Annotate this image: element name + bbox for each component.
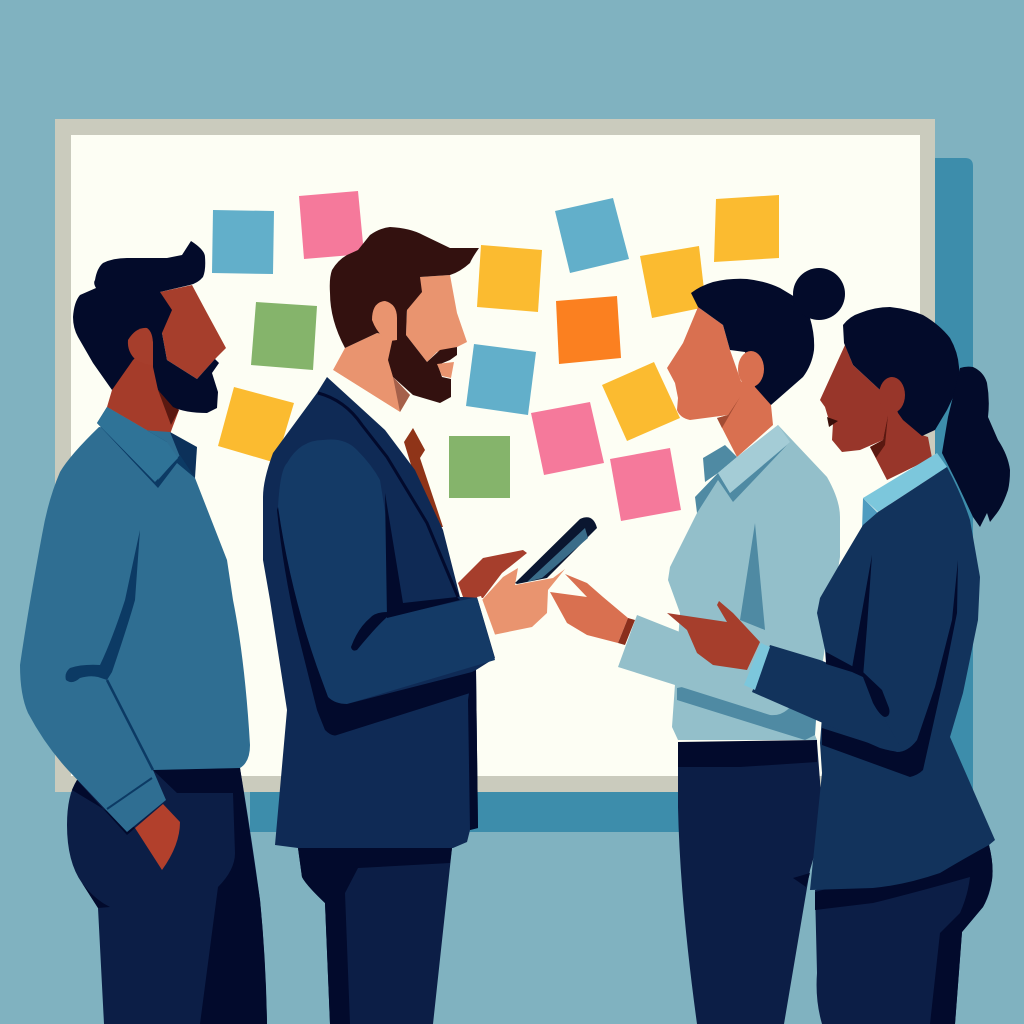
- trousers: [298, 848, 452, 1024]
- board shadow: [250, 158, 973, 832]
- arm highlight: [278, 439, 495, 704]
- cuff: [477, 596, 497, 650]
- face: [667, 307, 743, 420]
- neck: [107, 340, 179, 442]
- person 2: bearded man in navy suit: [263, 227, 597, 1024]
- trousers: [678, 742, 822, 1024]
- ear: [372, 301, 397, 341]
- sticky notes: [212, 191, 779, 521]
- blazer folds: [852, 555, 872, 677]
- lip: [437, 362, 454, 378]
- person 3: woman in light blue shirt: [550, 268, 845, 1024]
- ear: [738, 351, 764, 387]
- hair: [73, 241, 205, 390]
- person 4: woman in navy blazer: [667, 307, 1010, 1024]
- dark band under arm: [277, 507, 472, 735]
- neck: [333, 333, 410, 412]
- person 1: man in blue shirt: [20, 241, 267, 1024]
- elbow crease: [351, 612, 388, 651]
- inner collar: [703, 445, 737, 482]
- blazer: [810, 467, 995, 890]
- neck: [717, 380, 773, 457]
- collar: [695, 425, 790, 513]
- shirt collar: [862, 453, 947, 530]
- shirt: [668, 425, 840, 740]
- hair and bun: [691, 268, 845, 405]
- hand: [550, 574, 628, 643]
- sleeve shadow: [677, 670, 818, 740]
- ponytail: [942, 367, 1010, 527]
- beard: [153, 333, 219, 413]
- face: [406, 275, 467, 362]
- hair: [843, 307, 960, 436]
- whiteboard: [55, 119, 935, 792]
- ear: [128, 328, 153, 365]
- jacket: [263, 377, 495, 848]
- hair: [330, 227, 479, 348]
- cuff: [744, 643, 770, 690]
- hand in pocket: [135, 804, 180, 870]
- beard: [388, 305, 457, 403]
- shirt fold: [740, 523, 765, 630]
- shirt: [20, 427, 250, 832]
- arm: [752, 645, 903, 752]
- trousers: [815, 845, 993, 1024]
- hand: [667, 601, 760, 670]
- sleeve fold and seam: [66, 530, 140, 682]
- lapel line: [318, 393, 458, 597]
- ear: [879, 377, 905, 413]
- sleeve: [618, 615, 810, 715]
- face: [820, 345, 895, 452]
- hands: [458, 550, 527, 598]
- shirt and tie: [327, 370, 425, 470]
- inner dark wedge: [385, 493, 460, 618]
- phone: [515, 517, 597, 584]
- face: [160, 285, 226, 379]
- mouth: [827, 417, 838, 427]
- trousers: [67, 768, 267, 1024]
- neck: [870, 405, 932, 480]
- collar: [97, 407, 197, 488]
